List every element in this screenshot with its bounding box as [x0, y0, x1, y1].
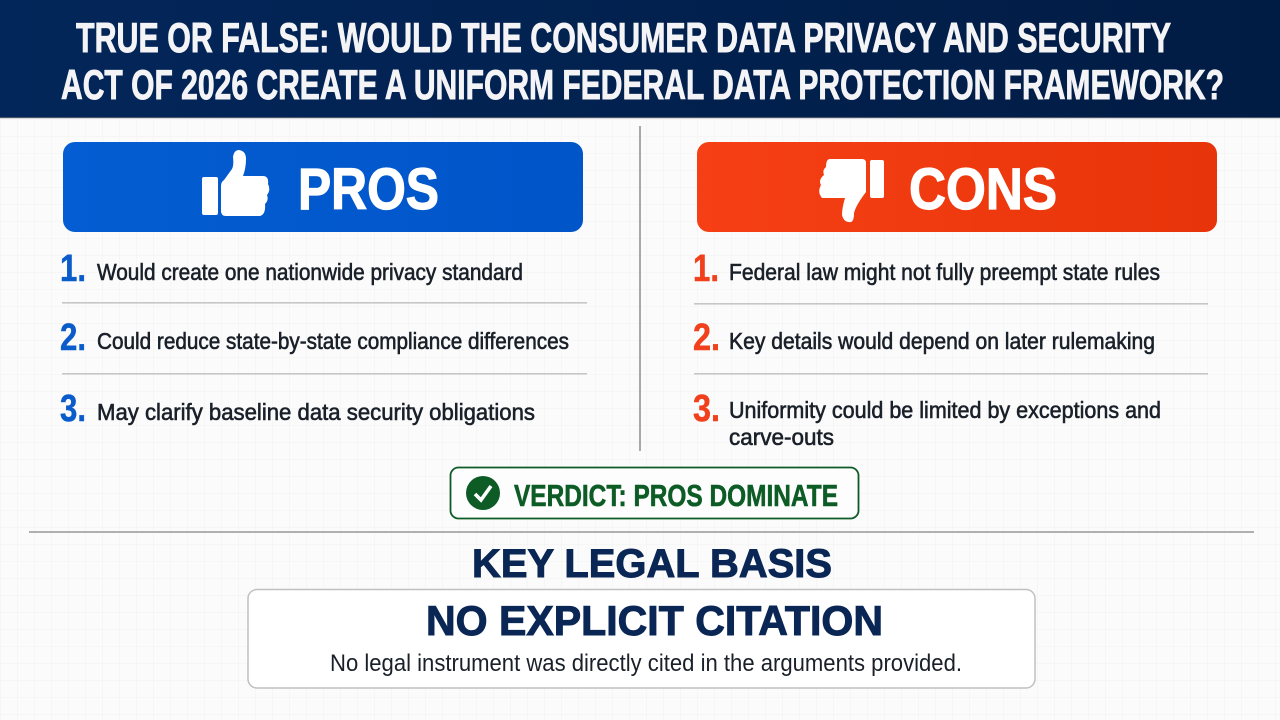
cons item 3: carve-outs — [729, 424, 834, 450]
cons heading banner — [697, 142, 1217, 232]
icon: thumbs down — [819, 159, 884, 222]
pros item 1: Would create one nationwide privacy standard — [97, 259, 523, 285]
pros item 2 — [60, 317, 569, 359]
cons item 3: Uniformity could be limited by exceptions and — [729, 397, 1161, 423]
pros item 1: 1. — [60, 248, 86, 290]
cons item 2: 2. — [693, 317, 720, 359]
verdict text: VERDICT: PROS DOMINATE — [514, 478, 838, 513]
cons item 2: Key details would depend on later rulemaking — [729, 328, 1155, 354]
cons label: CONS — [909, 157, 1057, 222]
key legal basis heading: KEY LEGAL BASIS — [472, 542, 832, 586]
cons item 1: Federal law might not fully preempt state rules — [729, 259, 1160, 285]
cons item 1 — [693, 248, 1160, 290]
pros item 3: May clarify baseline data security obligations — [97, 399, 535, 425]
citation note: No legal instrument was directly cited in the arguments provided. — [330, 650, 962, 677]
pros item 1 — [60, 248, 523, 290]
pros item 2: 2. — [60, 317, 86, 359]
center divider — [639, 126, 641, 451]
header banner — [0, 0, 1280, 118]
pros heading banner — [63, 142, 583, 232]
cons item 3 — [693, 388, 1161, 450]
pros label: PROS — [298, 157, 439, 222]
pros item 3 — [60, 388, 535, 430]
pros item 3: 3. — [60, 388, 86, 430]
pros item 2: Could reduce state-by-state compliance differences — [97, 328, 569, 354]
cons item 1: 1. — [693, 248, 719, 290]
panel: pros — [60, 142, 587, 430]
cons item 2 — [693, 317, 1155, 359]
panel: cons — [693, 142, 1217, 450]
cons item 3: 3. — [693, 388, 720, 430]
citation heading: NO EXPLICIT CITATION — [426, 597, 883, 644]
verdict badge — [450, 468, 858, 518]
icon: thumbs up — [202, 150, 269, 216]
panel: legal basis — [248, 590, 1035, 688]
icon: check circle — [466, 476, 500, 510]
